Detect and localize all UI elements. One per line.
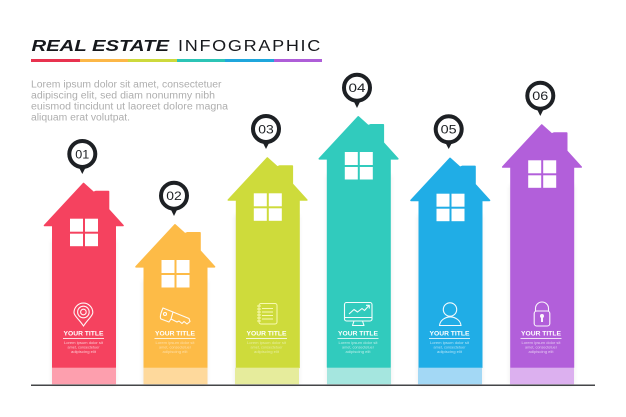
light base 4 (327, 368, 391, 384)
icon: person (440, 303, 461, 326)
caption 4: amet, consectetuer (342, 346, 375, 350)
intro paragraph: euismod tincidunt ut laoreet dolore magna (31, 102, 228, 112)
caption 3: Lorem ipsum dolor sit (247, 341, 286, 345)
caption 5: YOUR TITLE (430, 332, 470, 338)
caption 5: adipiscing elit (437, 350, 462, 354)
light base 3 (235, 368, 299, 384)
panel: house 6 (503, 125, 581, 384)
caption 6: adipiscing elit (528, 350, 554, 354)
icon: notebook (257, 304, 277, 324)
caption 2: amet, consectetuer (159, 346, 192, 350)
caption 3: amet, consectetuer (250, 346, 283, 350)
caption 4: YOUR TITLE (338, 332, 378, 338)
intro paragraph: aliquam erat volutpat. (31, 112, 130, 124)
marker 04: 04 (348, 81, 366, 95)
title (32, 38, 322, 55)
marker 01: 01 (75, 147, 90, 161)
title: REAL ESTATE (32, 38, 171, 55)
caption 1: amet, consectetuer (68, 346, 100, 350)
caption 1 (63, 332, 104, 354)
caption 3: YOUR TITLE (246, 332, 286, 338)
icon: key (160, 308, 190, 324)
baseline (31, 385, 595, 386)
window 2 (162, 260, 190, 288)
window 4 (345, 152, 373, 180)
caption 2: adipiscing elit (162, 350, 188, 354)
column shadows (52, 175, 574, 385)
marker 05 (436, 116, 462, 149)
caption 4 (338, 332, 378, 354)
house shape 4 (319, 117, 398, 367)
caption 6 (520, 332, 562, 354)
panel: house 3 (228, 158, 307, 384)
marker 03 (253, 116, 279, 149)
intro paragraph: adipiscing elit, sed diam nonummy nibh (31, 90, 215, 102)
window 5 (436, 194, 464, 221)
intro paragraph (31, 80, 228, 124)
caption 5: amet, consectetuer (434, 346, 466, 350)
rainbow title underline (31, 59, 322, 62)
icon: chart monitor (344, 302, 372, 326)
caption 1: adipiscing elit (71, 350, 96, 354)
intro paragraph: Lorem ipsum dolor sit amet, consectetuer (31, 80, 222, 90)
caption 3: adipiscing elit (254, 350, 279, 354)
marker 06: 06 (532, 89, 549, 103)
window 1 (70, 219, 98, 246)
marker 01 (69, 141, 95, 174)
light base 6 (510, 368, 574, 384)
marker 03: 03 (258, 122, 274, 136)
panel: house 5 (411, 158, 490, 384)
icon: padlock (534, 302, 550, 326)
caption 1: Lorem ipsum dolor sit (64, 341, 103, 345)
caption 6: Lorem ipsum dolor sit (522, 341, 560, 345)
title: INFOGRAPHIC (178, 38, 322, 55)
panel: house 2 (136, 225, 214, 384)
caption 5 (429, 332, 470, 354)
house shape 2 (136, 225, 214, 368)
window 3 (254, 193, 282, 221)
caption 2 (154, 332, 196, 354)
house shape 3 (228, 158, 307, 368)
caption 5: Lorem ipsum dolor sit (430, 341, 469, 345)
light base 1 (52, 368, 116, 384)
light base 5 (418, 368, 482, 384)
panel: house 4 (319, 117, 398, 384)
marker 06 (527, 83, 553, 116)
caption 2: YOUR TITLE (155, 332, 195, 338)
marker 02 (161, 183, 187, 216)
caption 4: adipiscing elit (346, 350, 370, 354)
marker 05: 05 (441, 123, 457, 137)
house shape 1 (44, 184, 123, 368)
caption 6: YOUR TITLE (521, 332, 561, 338)
house shape 6 (503, 125, 581, 368)
caption 6: amet, consectetuer (525, 346, 558, 350)
caption 1: YOUR TITLE (64, 332, 104, 338)
house shape 5 (411, 158, 490, 367)
window 6 (528, 160, 556, 188)
caption 3 (246, 332, 287, 354)
caption 4: Lorem ipsum dolor sit (338, 341, 378, 345)
marker 02: 02 (166, 189, 182, 203)
panel: house 1 (44, 184, 123, 384)
icon: location pin (74, 303, 93, 326)
caption 2: Lorem ipsum dolor sit (156, 341, 194, 345)
light base 2 (144, 368, 208, 384)
marker 04 (344, 75, 370, 108)
